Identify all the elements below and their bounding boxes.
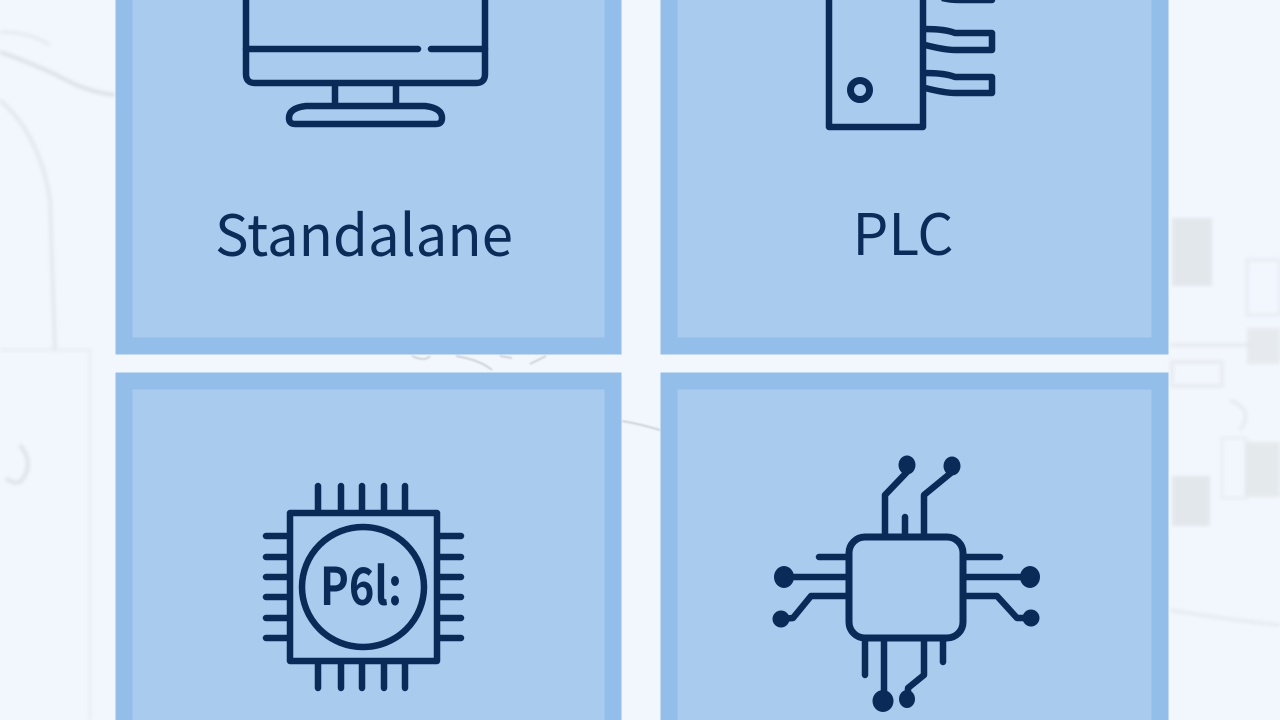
icon: computer monitor [246,0,485,124]
chip label: P6l: [320,545,402,620]
connector traces between panels [412,356,660,430]
panel: PC-based chip [124,381,613,720]
icon: processor chip [266,486,461,688]
panel: Standalone [124,0,613,346]
icon: circuit chip [772,456,1040,712]
icon: PLC module [829,0,992,127]
panel: PLC [669,0,1160,346]
panel: microcontroller [669,381,1160,720]
label: Standalane: Standalane [215,191,513,273]
label: PLC: PLC [852,190,954,272]
